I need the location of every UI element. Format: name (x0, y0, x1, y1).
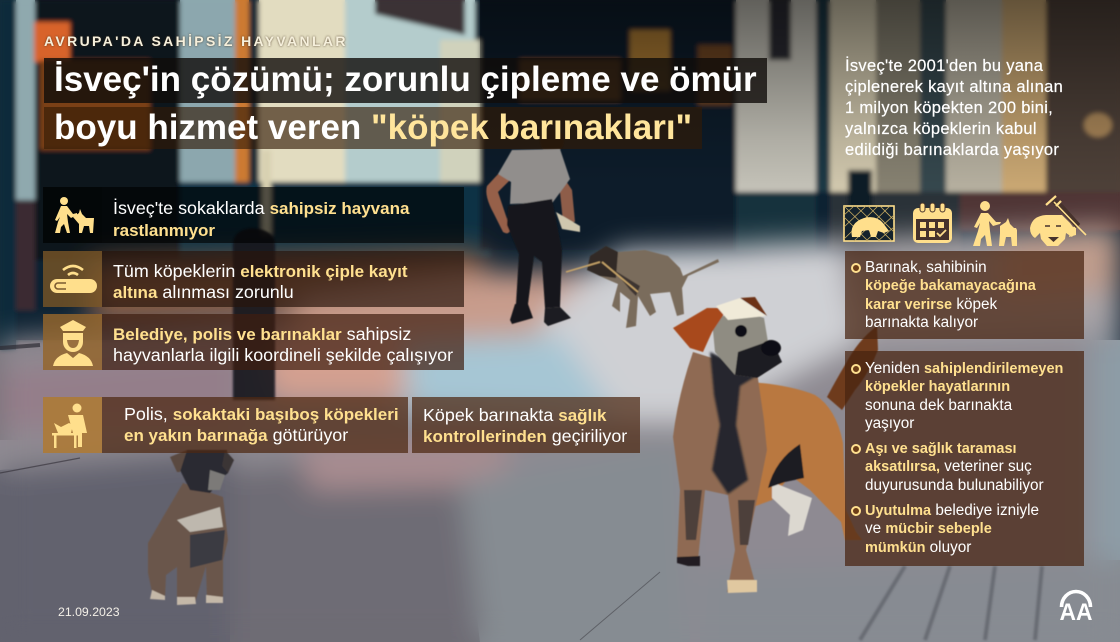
text (113, 198, 410, 240)
text: rehoming (865, 360, 1063, 432)
head (712, 310, 782, 378)
title line 2: boyu hizmet veren "köpek barınakları" (54, 108, 692, 147)
bullet (850, 444, 860, 454)
panel: coordination (43, 314, 464, 370)
bullet (850, 364, 860, 374)
man's boots (510, 304, 533, 324)
text (124, 404, 399, 445)
paws (677, 556, 700, 566)
street pole (233, 228, 275, 400)
panel: shelter rules (845, 351, 1084, 566)
text: rehoming: köpekler hayatlarının (865, 379, 1010, 395)
man's head (540, 129, 564, 153)
text: euthanasia (865, 502, 1039, 556)
text: Barınak, sahibinin (865, 259, 987, 276)
kicker heading: AVRUPA'DA SAHİPSİZ HAYVANLAR (44, 33, 348, 49)
text: kontrollerinden geçiriliyor (423, 426, 627, 446)
far hind leg (772, 482, 812, 536)
intro text: edildiği barınaklarda yaşıyor (845, 141, 1059, 159)
icon: calendar (913, 203, 952, 243)
text (423, 404, 627, 446)
bullet (850, 263, 860, 273)
text: Polis, sokaktaki başıboş köpekleri (124, 404, 399, 424)
bullet (850, 506, 860, 516)
man's trousers (507, 199, 562, 308)
large dog (673, 297, 878, 593)
logo: AA (1060, 590, 1092, 623)
panel: mandatory chip (43, 251, 464, 307)
icon: person with dog (43, 187, 102, 243)
text (113, 324, 453, 365)
text: rastlanmıyor (113, 220, 215, 240)
text: vaccination: aksatılırsa, veteriner suç (865, 458, 1032, 475)
text: vaccination: duyurusunda bulunabiliyor (865, 477, 1044, 494)
icon: vet with dog on table (43, 397, 102, 453)
date: 21.09.2023 (58, 605, 120, 619)
intro text: yalnızca köpeklerin kabul (845, 120, 1037, 138)
panel: health checks (412, 397, 640, 453)
man's arms (486, 172, 510, 233)
text: altına alınması zorunlu (113, 282, 294, 302)
intro text (845, 56, 1063, 159)
icon: electronic chip (43, 251, 102, 307)
text: rehoming: sonuna dek barınakta (865, 397, 1012, 414)
chest and front legs (673, 352, 767, 592)
intro text: çiplenerek kayıt altına alınan (845, 78, 1063, 96)
icon: caged animal (844, 206, 894, 241)
intro text: 1 milyon köpekten 200 bini, (845, 99, 1053, 117)
panel: owner gives up dog (845, 251, 1084, 339)
leg shading (684, 490, 755, 545)
text: vaccination: Aşı ve sağlık taraması (865, 441, 1017, 457)
intro text: İsveç'te 2001'den bu yana (845, 57, 1043, 75)
icon: person with dog (973, 201, 1017, 246)
body (745, 382, 862, 540)
text: rehoming: Yeniden sahiplendirilemeyen (865, 360, 1063, 377)
text (865, 259, 1036, 331)
text: Tüm köpeklerin elektronik çiple kayıt (113, 260, 408, 280)
panel: no stray animals (43, 187, 464, 243)
text: barınakta kalıyor (865, 314, 978, 331)
icon: dog head with syringe (1030, 196, 1086, 246)
text: Köpek barınakta sağlık (423, 404, 606, 424)
text: vaccination (865, 441, 1044, 494)
text: en yakın barınağa götürüyor (124, 425, 348, 445)
text: euthanasia: mümkün oluyor (865, 539, 971, 556)
text: Belediye, polis ve barınaklar sahipsiz (113, 324, 411, 344)
text: rehoming: yaşıyor (865, 415, 914, 432)
text: euthanasia: Uyutulma belediye izniyle (865, 502, 1039, 519)
text: İsveç'te sokaklarda sahipsiz hayvana (113, 198, 409, 218)
man's shirt (498, 149, 570, 204)
dark mane (710, 352, 758, 494)
text: köpeğe bakamayacağına (865, 278, 1036, 294)
tail (827, 326, 878, 410)
panel: police take dogs to shelter (43, 397, 408, 453)
icon: police officer (43, 314, 102, 370)
text: karar verirse köpek (865, 296, 997, 313)
icon row (843, 195, 1086, 246)
small foreground dog (148, 450, 234, 605)
small background dog (566, 246, 719, 328)
text: hayvanlarla ilgili koordineli şekilde çalışıyor (113, 345, 453, 365)
title line 1: İsveç'in çözümü; zorunlu çipleme ve ömür (54, 60, 757, 99)
text (113, 260, 408, 302)
text: euthanasia: ve mücbir sebeple (865, 520, 992, 537)
